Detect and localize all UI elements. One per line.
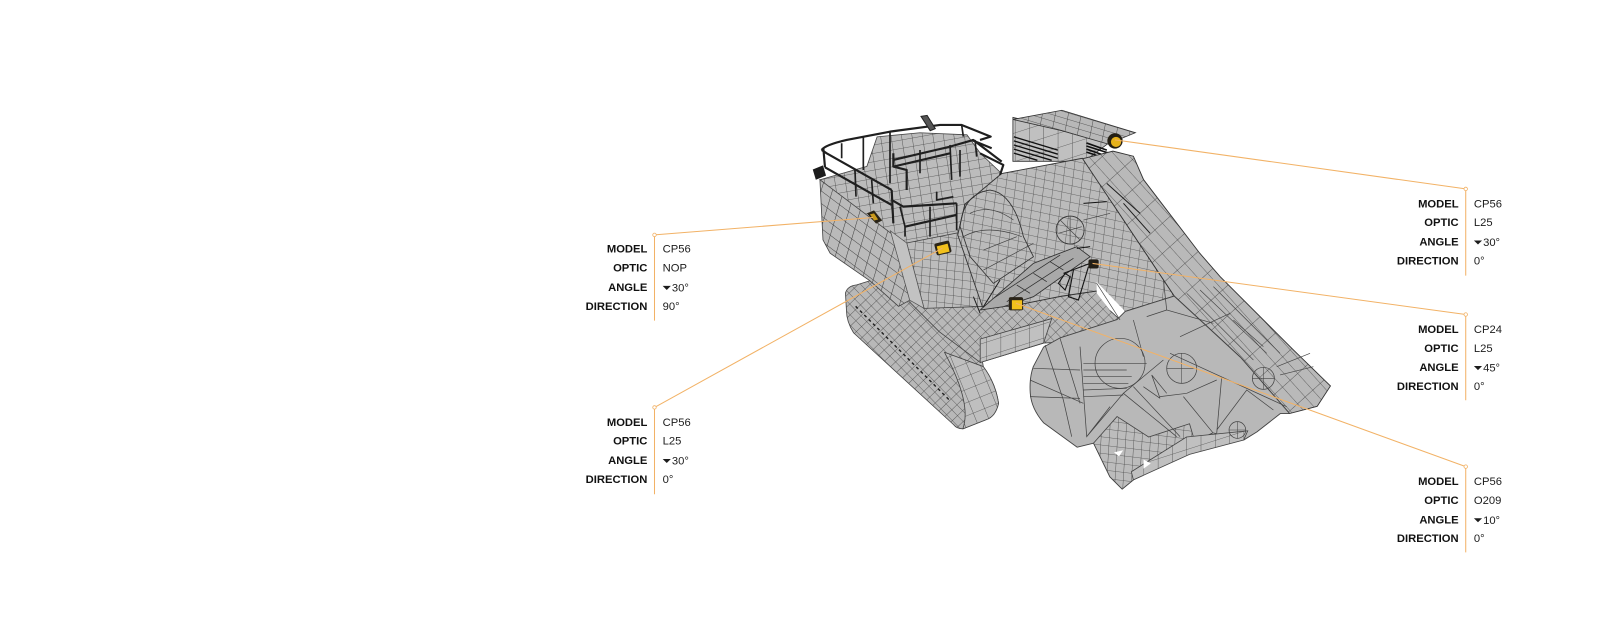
house front wall — [907, 233, 986, 308]
callout: rear side lamp: CP56 — [663, 244, 691, 256]
boom foot shoulder — [958, 158, 1174, 311]
callout: carbody lamp: O209 — [1474, 495, 1501, 507]
opening behind arm — [1097, 282, 1125, 311]
callout: cab front lamp: OPTIC — [613, 436, 647, 448]
boom — [1080, 151, 1330, 414]
callout: carbody lamp: ANGLE — [1419, 514, 1459, 526]
callout: rear side lamp: MODEL — [607, 244, 647, 256]
carbody — [899, 291, 1123, 362]
lamp: carbody — [1009, 297, 1023, 310]
callout: roof box lamp: OPTIC — [1424, 217, 1459, 229]
callout: cab front lamp: L25 — [663, 436, 681, 448]
crawler track — [845, 281, 999, 429]
callout: roof box lamp: CP56 — [1474, 198, 1502, 210]
callout: roof box lamp: 0° — [1474, 255, 1485, 267]
lamp: roof box — [1107, 133, 1123, 149]
track end cap — [944, 352, 999, 429]
callout: boom foot lamp: 45° — [1483, 363, 1500, 375]
callout: roof box lamp — [1115, 140, 1502, 276]
lamp: rear side — [867, 210, 882, 224]
callout: rear side lamp: OPTIC — [613, 263, 647, 275]
callout: cab front lamp — [586, 248, 942, 494]
rear black lamp block — [813, 165, 826, 180]
counterweight roof box — [1013, 110, 1135, 161]
rear house side — [820, 180, 910, 306]
callout: carbody lamp: MODEL — [1418, 476, 1459, 488]
callout: cab front lamp: CP56 — [663, 417, 691, 429]
carbody front band — [980, 319, 1052, 362]
callout: rear side lamp: ANGLE — [608, 282, 648, 294]
callout: cab front lamp: 30° — [672, 456, 689, 468]
callout: boom foot lamp: 0° — [1474, 381, 1485, 393]
louver stripes — [1014, 137, 1109, 160]
stick and bucket mesh lines — [1030, 280, 1313, 438]
callout: roof box lamp: MODEL — [1418, 198, 1459, 210]
callout: rear side lamp: NOP — [663, 263, 687, 275]
callout: boom foot lamp: DIRECTION — [1397, 381, 1459, 393]
dome, cylinder and lift arm lines — [960, 183, 1150, 313]
link openings — [1114, 450, 1151, 469]
lamp: boom foot — [1088, 259, 1099, 269]
callout: boom foot lamp: L25 — [1474, 343, 1493, 355]
callout: cab front lamp: MODEL — [607, 417, 647, 429]
callout: rear side lamp: 30° — [672, 283, 689, 295]
callout: boom foot lamp: ANGLE — [1419, 362, 1459, 374]
callout: carbody lamp: OPTIC — [1424, 495, 1459, 507]
callout: carbody lamp: DIRECTION — [1397, 533, 1459, 545]
callout: carbody lamp — [1016, 303, 1502, 552]
callout: cab front lamp: DIRECTION — [586, 474, 647, 486]
bucket and stick — [1030, 296, 1290, 489]
callout: rear side lamp: 90° — [663, 301, 680, 313]
upper deck and machinery — [820, 133, 1002, 245]
excavator wireframe — [813, 110, 1330, 489]
callout: roof box lamp: DIRECTION — [1397, 255, 1459, 267]
callout: cab front lamp: 0° — [663, 474, 673, 486]
bucket linkage — [1094, 417, 1195, 489]
callout: roof box lamp: L25 — [1474, 217, 1493, 229]
link bar — [1131, 431, 1248, 480]
callout: boom foot lamp: OPTIC — [1424, 343, 1459, 355]
callout: rear side lamp: DIRECTION — [586, 301, 647, 313]
callout: carbody lamp: 0° — [1474, 533, 1485, 545]
callout: boom foot lamp: CP24 — [1474, 324, 1502, 336]
callout: carbody lamp: CP56 — [1474, 476, 1502, 488]
lamp: cab front — [934, 240, 952, 256]
callout: carbody lamp: 10° — [1483, 515, 1500, 527]
safety railing — [822, 125, 1003, 237]
smooth corner panel — [890, 231, 924, 308]
callout: boom foot lamp — [1093, 263, 1502, 400]
callout: roof box lamp: 30° — [1483, 237, 1500, 249]
callout: cab front lamp: ANGLE — [608, 455, 648, 467]
callout: roof box lamp: ANGLE — [1419, 237, 1459, 249]
callout: rear side lamp — [586, 217, 873, 321]
callout: boom foot lamp: MODEL — [1418, 324, 1459, 336]
exhaust stack — [921, 115, 935, 131]
